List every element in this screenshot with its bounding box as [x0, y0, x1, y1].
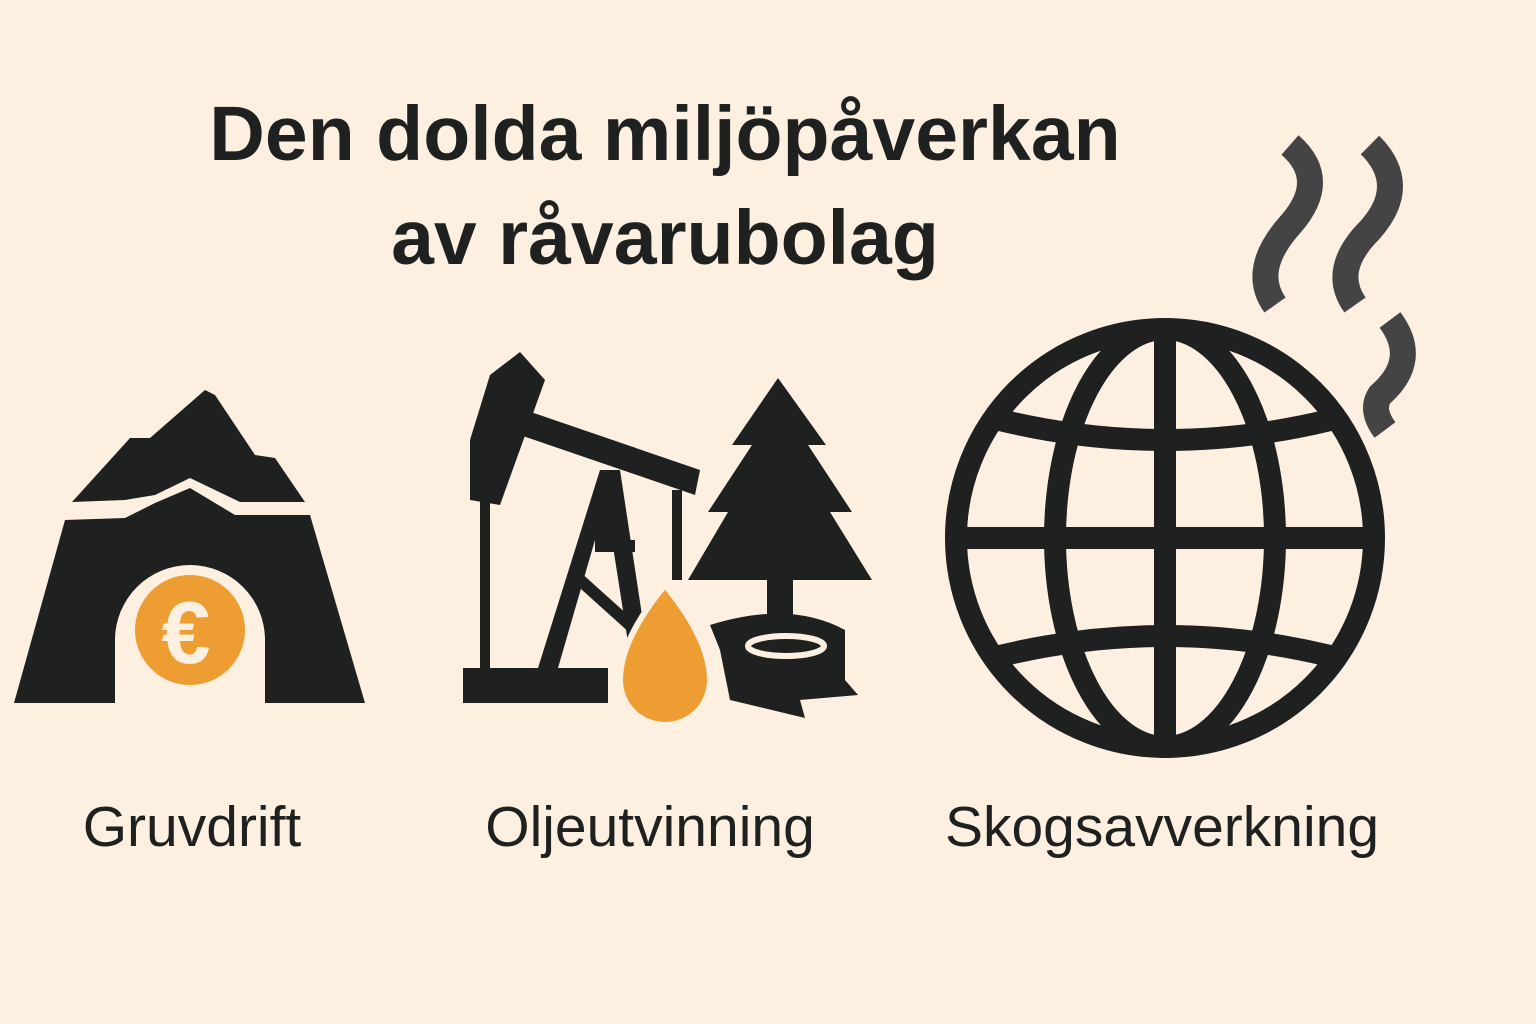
title: av råvarubolag [391, 195, 939, 281]
icon: mine [14, 390, 365, 703]
title [209, 91, 1121, 281]
icon: smoke [1265, 145, 1403, 430]
icon: mine: € [162, 583, 210, 682]
title: Den dolda miljöpåverkan [209, 91, 1121, 177]
icon: pump jack with oil drop and tree [463, 352, 872, 725]
label: Oljeutvinning: Oljeutvinning [485, 795, 815, 859]
icon: globe [956, 329, 1374, 747]
label: Gruvdrift: Gruvdrift [83, 795, 301, 859]
label: Skogsavverkning: Skogsavverkning [945, 795, 1379, 859]
